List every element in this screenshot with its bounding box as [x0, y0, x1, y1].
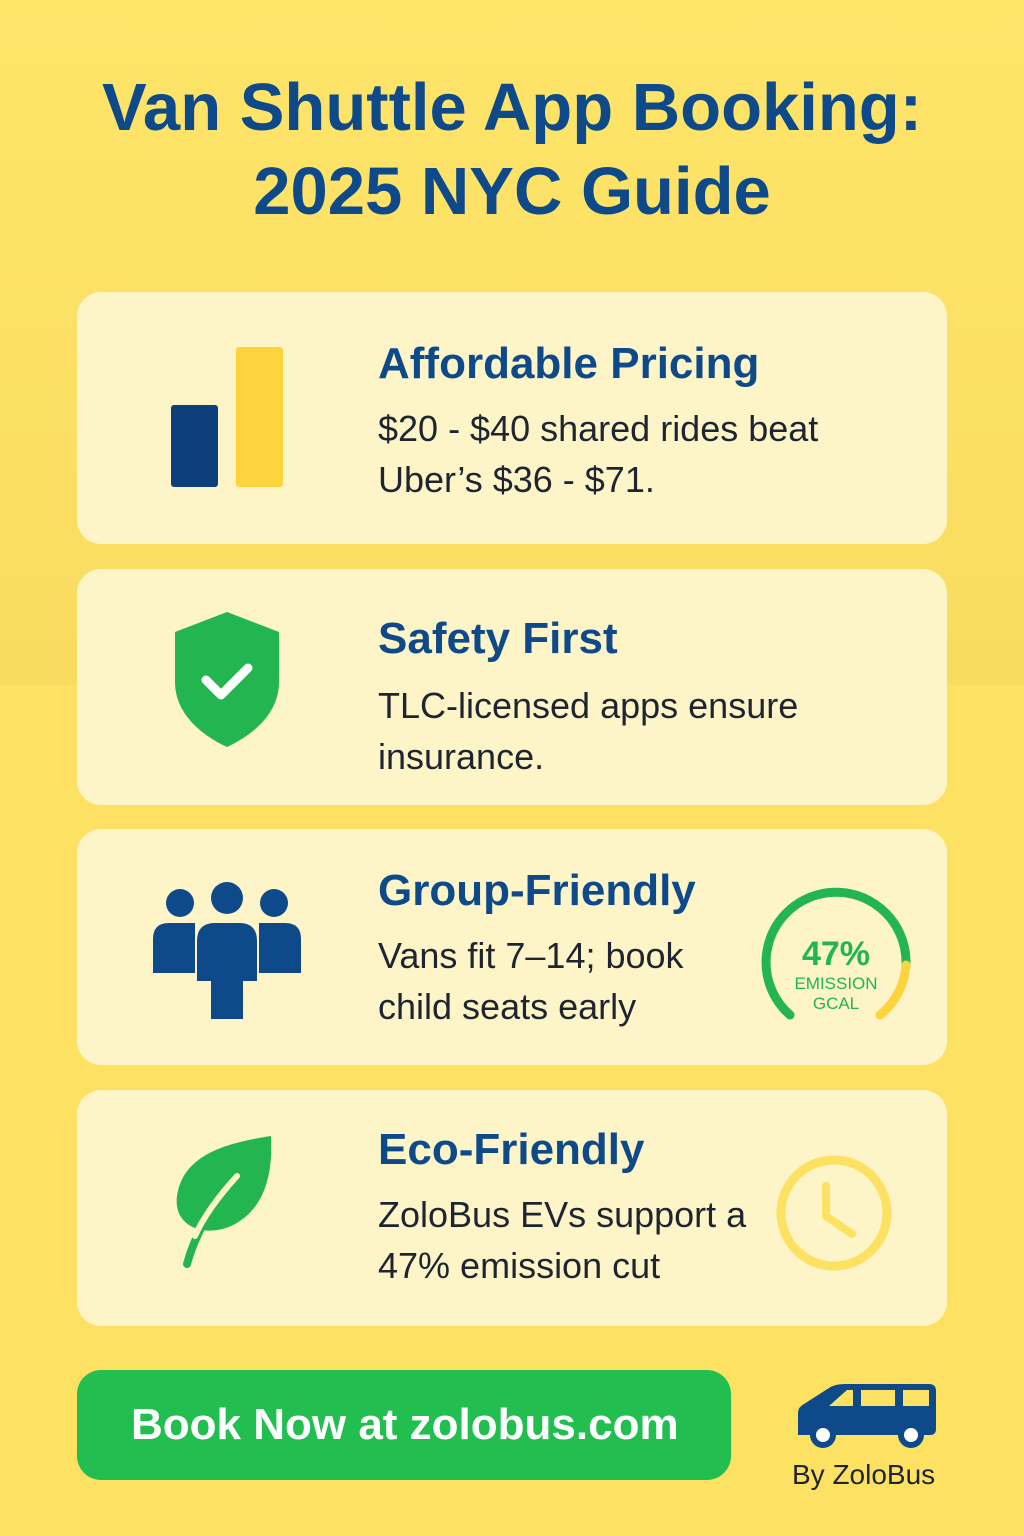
text: TLC-licensed apps ensure — [378, 685, 798, 726]
panel: safety first — [77, 569, 947, 805]
heading: Eco-Friendly — [378, 1125, 644, 1174]
text: 47% emission cut — [378, 1245, 660, 1286]
text: Vans fit 7–14; book — [378, 935, 684, 976]
text — [378, 1194, 746, 1286]
icon: leaf — [176, 1136, 272, 1268]
heading: Affordable Pricing — [378, 339, 759, 388]
gauge: 47% emission — [762, 888, 911, 1020]
panel: affordable pricing — [77, 292, 947, 544]
button: book now: Book Now at zolobus.com — [131, 1400, 679, 1449]
gauge: 47% emission: GCAL — [813, 994, 859, 1013]
text: $20 - $40 shared rides beat — [378, 408, 818, 449]
icon: bar chart — [171, 347, 283, 487]
text: insurance. — [378, 736, 544, 777]
brand text: By ZoloBus — [792, 1459, 935, 1490]
text: Uber’s $36 - $71. — [378, 459, 655, 500]
text — [378, 685, 798, 777]
title: Van Shuttle App Booking: — [102, 70, 922, 145]
heading: Safety First — [378, 614, 618, 663]
title: 2025 NYC Guide — [253, 154, 771, 229]
panel: eco-friendly — [77, 1090, 947, 1326]
icon: clock — [776, 1156, 892, 1270]
heading: Group-Friendly — [378, 866, 696, 915]
text — [378, 408, 818, 500]
icon: group — [153, 882, 301, 1019]
text: child seats early — [378, 986, 636, 1027]
text — [378, 935, 684, 1027]
panel: group-friendly — [77, 829, 947, 1065]
gauge: 47% emission: EMISSION — [794, 974, 878, 993]
icon: shield — [175, 612, 279, 747]
text: ZoloBus EVs support a — [378, 1194, 746, 1235]
icon: van — [798, 1384, 936, 1448]
gauge: 47% emission: 47% — [802, 935, 870, 973]
title — [102, 70, 922, 229]
button: book now — [77, 1370, 731, 1480]
